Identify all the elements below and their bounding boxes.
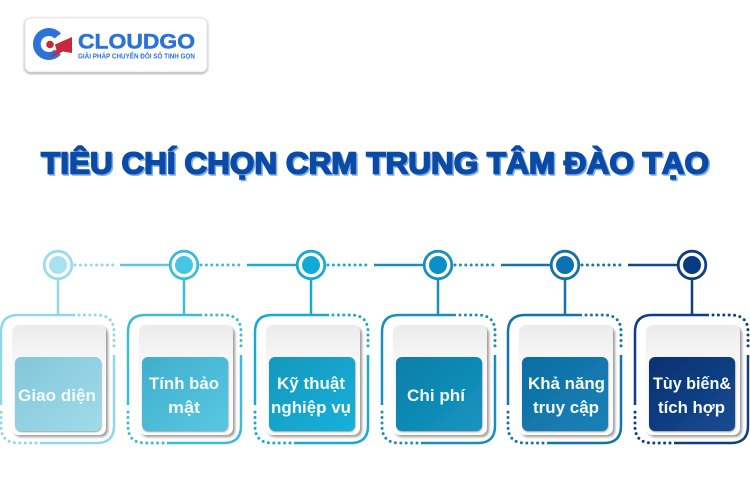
- brand name: CLOUDGO: [78, 30, 195, 54]
- node 2: [170, 251, 198, 315]
- card 2: Tính bảo mật: [128, 251, 241, 443]
- panel 1: [15, 357, 101, 431]
- card 3: Kỹ thuật nghiệp vụ: [255, 251, 368, 443]
- label 1: Giao diện: [18, 386, 96, 405]
- frame 4: [382, 315, 495, 443]
- label 5: Khả năng: [528, 374, 605, 393]
- frame 2: [128, 315, 241, 443]
- white card 2: [139, 325, 233, 435]
- card 4: Chi phí: [382, 251, 495, 443]
- label 3: nghiệp vụ: [271, 398, 351, 417]
- label 6: Tùy biến&: [653, 374, 731, 393]
- frame 1: [1, 315, 114, 443]
- white card 5: [519, 325, 613, 435]
- panel 6: [649, 357, 735, 431]
- title: TIÊU CHÍ CHỌN CRM TRUNG TÂM ĐÀO TẠO: [42, 146, 710, 182]
- panel 2: [142, 357, 228, 431]
- logo: CloudGO badge: [25, 18, 207, 72]
- timeline connectors: [75, 264, 679, 266]
- node 1: [44, 251, 72, 315]
- node 5: [551, 251, 579, 315]
- frame 3: [255, 315, 368, 443]
- node 4: [424, 251, 452, 315]
- label 3: Kỹ thuật: [277, 374, 345, 393]
- white card 6: [646, 325, 740, 435]
- label 2: [149, 374, 219, 417]
- label 5: truy cập: [533, 398, 599, 417]
- white card 1: [12, 325, 106, 435]
- card 1: Giao diện: [1, 251, 114, 443]
- panel 5: [522, 357, 608, 431]
- panel 3: [269, 357, 355, 431]
- label 4: Chi phí: [407, 386, 466, 405]
- frame 6: [635, 315, 748, 443]
- white card 3: [266, 325, 360, 435]
- node 3: [297, 251, 325, 315]
- label 6: tích hợp: [658, 398, 725, 417]
- label 2: Tính bảo: [149, 374, 219, 393]
- label 6: [653, 374, 731, 417]
- label 3: [271, 374, 351, 417]
- panel 4: [396, 357, 482, 431]
- title: TIÊU CHÍ CHỌN CRM TRUNG TÂM ĐÀO TẠO: [41, 144, 709, 180]
- tagline: GIẢI PHÁP CHUYỂN ĐỔI SỐ TINH GỌN: [78, 50, 195, 60]
- card 6: Tùy biến & tích hợp: [635, 251, 748, 443]
- label 2: mật: [168, 398, 200, 417]
- frame 5: [508, 315, 621, 443]
- white card 4: [393, 325, 487, 435]
- node 6: [678, 251, 706, 315]
- label 5: [528, 374, 605, 417]
- icon: CloudGO mark: [33, 28, 72, 60]
- card 5: Khả năng truy cập: [508, 251, 621, 443]
